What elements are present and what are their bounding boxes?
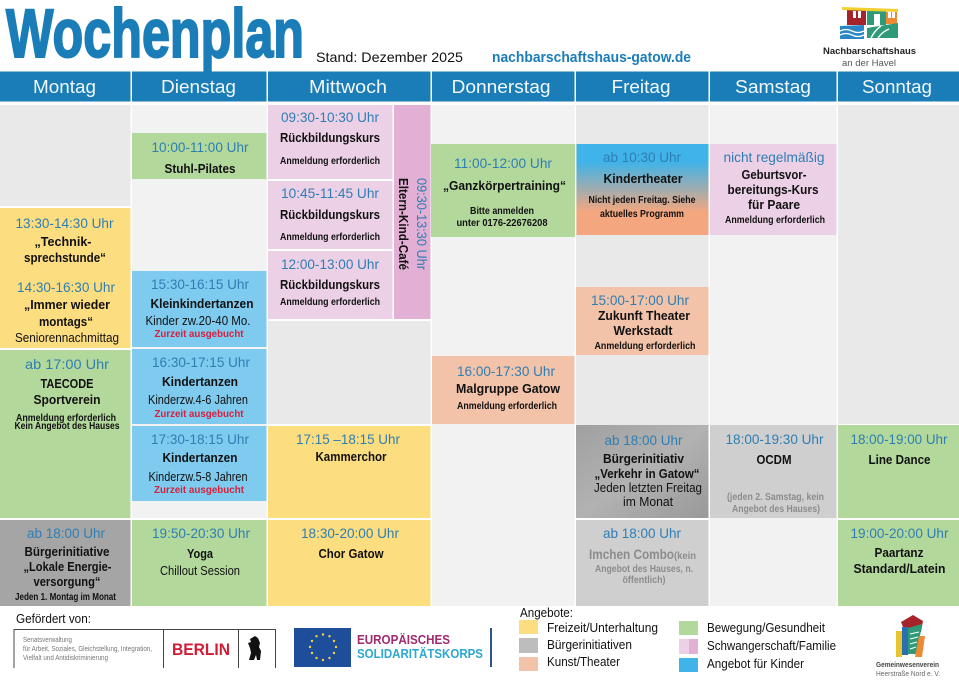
- panel: Donnerstag: Bitte anmelden: [470, 206, 534, 217]
- panel: Montag: sprechstunde“: [24, 250, 106, 265]
- legend: Bürgerinitiativen: [547, 637, 632, 652]
- panel: Freitag: [576, 144, 708, 606]
- panel: Samstag: Geburtsvor-: [742, 167, 806, 182]
- panel: Montag: ab 17:00 Uhr: [25, 356, 109, 372]
- panel: Mittwoch: Anmeldung erforderlich: [280, 232, 380, 243]
- panel: Freitag: Werkstadt: [614, 323, 673, 338]
- weekday header bar: Mittwoch: [309, 77, 387, 97]
- panel: Mittwoch: Chor Gatow: [318, 546, 384, 561]
- panel: Dienstag: 16:30-17:15 Uhr: [152, 354, 250, 370]
- weekday header bar: [0, 72, 959, 102]
- panel: Dienstag: 19:50-20:30 Uhr: [152, 525, 250, 541]
- website address: nachbarschaftshaus-gatow.de: [492, 50, 691, 66]
- panel: Sonntag: Paartanz: [874, 545, 924, 560]
- panel: Samstag: OCDM: [756, 452, 792, 467]
- timetable column backgrounds: [0, 105, 959, 606]
- weekday header bar: Sonntag: [862, 77, 932, 97]
- panel: Freitag: im Monat: [623, 495, 674, 509]
- panel: Samstag: (jeden 2. Samstag, kein: [727, 492, 824, 503]
- panel: Freitag: aktuelles Programm: [600, 209, 684, 220]
- legend: Schwangerschaft/Familie: [707, 638, 836, 653]
- panel: Samstag: nicht regelmäßig: [724, 149, 824, 165]
- panel: Samstag: bereitungs-Kurs: [728, 182, 818, 197]
- panel: Mittwoch: Eltern-Kind-Café: [396, 178, 411, 270]
- panel: Mittwoch: Anmeldung erforderlich: [280, 297, 380, 308]
- logo: Gemeinwesenverein Heerstraße Nord: [876, 615, 940, 678]
- panel: Dienstag: Zurzeit ausgebucht: [154, 484, 244, 496]
- legend: Bewegung/Gesundheit: [707, 620, 825, 635]
- funding heading: Gefördert von:: [16, 611, 91, 626]
- logo: European Solidarity Corps: [294, 628, 492, 667]
- panel: Mittwoch: 12:00-13:00 Uhr: [281, 256, 379, 272]
- weekday header bar: Montag: [33, 77, 96, 97]
- logo: European Solidarity Corps: EUROPÄISCHES: [357, 632, 450, 647]
- weekday header bar: Freitag: [612, 77, 670, 97]
- panel: Sonntag: 18:00-19:00 Uhr: [850, 431, 948, 447]
- logo: Berlin Senate administration: für Arbeit, Soziales, Gleichstellung, Integration,: [23, 646, 152, 653]
- panel: Montag: Bürgerinitiative: [24, 544, 110, 559]
- weekday header bar: Dienstag: [161, 77, 236, 97]
- panel: Mittwoch: Kammerchor: [316, 449, 386, 464]
- panel: Dienstag: Zurzeit ausgebucht: [154, 408, 244, 420]
- weekday header bar: Samstag: [735, 77, 811, 97]
- panel: Samstag: Angebot des Hauses): [732, 504, 820, 515]
- panel: Donnerstag: Anmeldung erforderlich: [457, 401, 557, 412]
- panel: Freitag: „Verkehr in Gatow“: [594, 466, 700, 481]
- status date: Stand: Dezember 2025: [316, 49, 463, 65]
- legend: Kunst/Theater: [547, 654, 621, 669]
- logo: Nachbarschaftshaus an der Havel: an der Havel: [842, 58, 896, 68]
- panel: Dienstag: Stuhl-Pilates: [164, 161, 236, 176]
- panel: Freitag: Bürgerinitiativ: [603, 451, 685, 466]
- weekday header bar: Donnerstag: [452, 77, 550, 97]
- panel: Montag: Jeden 1. Montag im Monat: [15, 592, 117, 603]
- panel: Freitag: Kindertheater: [604, 171, 682, 186]
- logo: Gemeinwesenverein Heerstraße Nord: Gemeinwesenverein: [876, 662, 939, 669]
- legend: [519, 605, 836, 672]
- panel: Mittwoch: Anmeldung erforderlich: [280, 156, 380, 167]
- panel: Donnerstag: [431, 144, 575, 424]
- panel: Freitag: Imchen Combo: [589, 547, 674, 562]
- panel: Mittwoch: Rückbildungskurs: [280, 130, 380, 145]
- panel: Montag: „Lokale Energie-: [24, 559, 112, 574]
- panel: Samstag: [710, 144, 836, 518]
- panel: Sonntag: Line Dance: [868, 452, 930, 467]
- panel: Dienstag: Kinderzw.5-8 Jahren: [148, 470, 248, 484]
- logo: Nachbarschaftshaus an der Havel: [823, 7, 916, 68]
- panel: Dienstag: 10:00-11:00 Uhr: [152, 139, 249, 155]
- panel: Samstag: 18:00-19:30 Uhr: [726, 431, 824, 447]
- panel: Samstag: für Paare: [748, 197, 800, 212]
- panel: Montag: Sportverein: [34, 392, 101, 407]
- panel: Freitag: Jeden letzten Freitag: [594, 481, 702, 495]
- panel: Dienstag: Kinderzw.4-6 Jahren: [148, 393, 248, 407]
- panel: Freitag: ab 18:00 Uhr: [604, 432, 683, 448]
- panel: Sonntag: 19:00-20:00 Uhr: [850, 525, 949, 541]
- panel: Freitag: ab 18:00 Uhr: [603, 525, 681, 541]
- panel: Montag: Anmeldung erforderlich: [16, 413, 116, 424]
- panel: Freitag: Nicht jeden Freitag. Siehe: [588, 195, 696, 206]
- panel: Montag: montags“: [39, 314, 93, 329]
- panel: Mittwoch: [268, 105, 430, 606]
- panel: Montag: 14:30-16:30 Uhr: [17, 279, 115, 295]
- panel: Montag: TAECODE: [40, 376, 94, 391]
- panel: Mittwoch: 18:30-20:00 Uhr: [301, 525, 399, 541]
- panel: Montag: ab 18:00 Uhr: [27, 525, 105, 541]
- panel: Mittwoch: 10:45-11:45 Uhr: [281, 185, 379, 201]
- panel: Dienstag: [132, 133, 266, 606]
- panel: Mittwoch: Rückbildungskurs: [280, 277, 380, 292]
- panel: Dienstag: Chillout Session: [160, 564, 240, 578]
- legend: Angebot für Kinder: [707, 656, 805, 671]
- panel: Freitag: 15:00-17:00 Uhr: [591, 292, 689, 308]
- panel: Montag: versorgung“: [34, 574, 100, 589]
- panel: Dienstag: Kindertanzen: [162, 450, 238, 465]
- panel: Dienstag: 15:30-16:15 Uhr: [151, 276, 249, 292]
- logo: European Solidarity Corps: SOLIDARITÄTSKORPS: [357, 646, 483, 661]
- panel: Donnerstag: 16:00-17:30 Uhr: [457, 363, 555, 379]
- panel: Samstag: Anmeldung erforderlich: [725, 215, 825, 226]
- logo: Berlin Senate administration: Senatsverwaltung: [23, 637, 72, 644]
- panel: Montag: Seniorennachmittag: [15, 331, 119, 345]
- panel: Mittwoch: 17:15 –18:15 Uhr: [296, 431, 400, 447]
- panel: Dienstag: 17:30-18:15 Uhr: [151, 431, 249, 447]
- logo: Nachbarschaftshaus an der Havel: Nachbarschaftshaus: [823, 46, 916, 56]
- panel: Freitag: öffentlich): [622, 575, 666, 586]
- panel: Donnerstag: „Ganzkörpertraining“: [443, 178, 566, 193]
- panel: Sonntag: Standard/Latein: [854, 561, 946, 576]
- logo: Gemeinwesenverein Heerstraße Nord: Heerstraße Nord e. V.: [876, 671, 940, 678]
- legend: Freizeit/Unterhaltung: [547, 620, 658, 635]
- panel: Montag: „Immer wieder: [24, 297, 110, 312]
- panel: Dienstag: Zurzeit ausgebucht: [154, 328, 244, 340]
- panel: Freitag: Anmeldung erforderlich: [594, 341, 696, 352]
- panel: Freitag: Angebot des Hauses, n.: [595, 564, 693, 575]
- panel: Montag: Kein Angebot des Hauses: [14, 421, 120, 432]
- panel: Mittwoch: Rückbildungskurs: [280, 207, 380, 222]
- panel: Freitag: (kein: [674, 551, 696, 562]
- panel: Freitag: Zukunft Theater: [598, 308, 690, 323]
- panel: Dienstag: Yoga: [187, 546, 214, 561]
- panel: Montag: „Technik-: [34, 234, 92, 249]
- panel: Sonntag: [838, 425, 959, 606]
- logo: Berlin Senate administration: Vielfalt und Antidiskriminierung: [23, 655, 108, 662]
- panel: Mittwoch: 09:30-13:30 Uhr: [414, 178, 430, 270]
- panel: Montag: [0, 208, 130, 606]
- legend: Angebote:: [520, 605, 573, 620]
- panel: Dienstag: Kleinkindertanzen: [150, 296, 254, 311]
- panel: Donnerstag: unter 0176-22676208: [456, 218, 548, 229]
- panel: Donnerstag: 11:00-12:00 Uhr: [454, 155, 552, 171]
- panel: Dienstag: Kindertanzen: [162, 374, 238, 389]
- panel: Dienstag: Kinder zw.20-40 Mo.: [146, 314, 250, 328]
- panel: Donnerstag: Malgruppe Gatow: [456, 381, 561, 396]
- panel: Montag: 13:30-14:30 Uhr: [16, 215, 114, 231]
- logo: Berlin Senate administration: BERLIN: [172, 640, 230, 659]
- panel: Mittwoch: 09:30-10:30 Uhr: [281, 109, 379, 125]
- panel: Freitag: ab 10:30 Uhr: [603, 149, 681, 165]
- logo: Berlin Senate administration: [14, 630, 276, 668]
